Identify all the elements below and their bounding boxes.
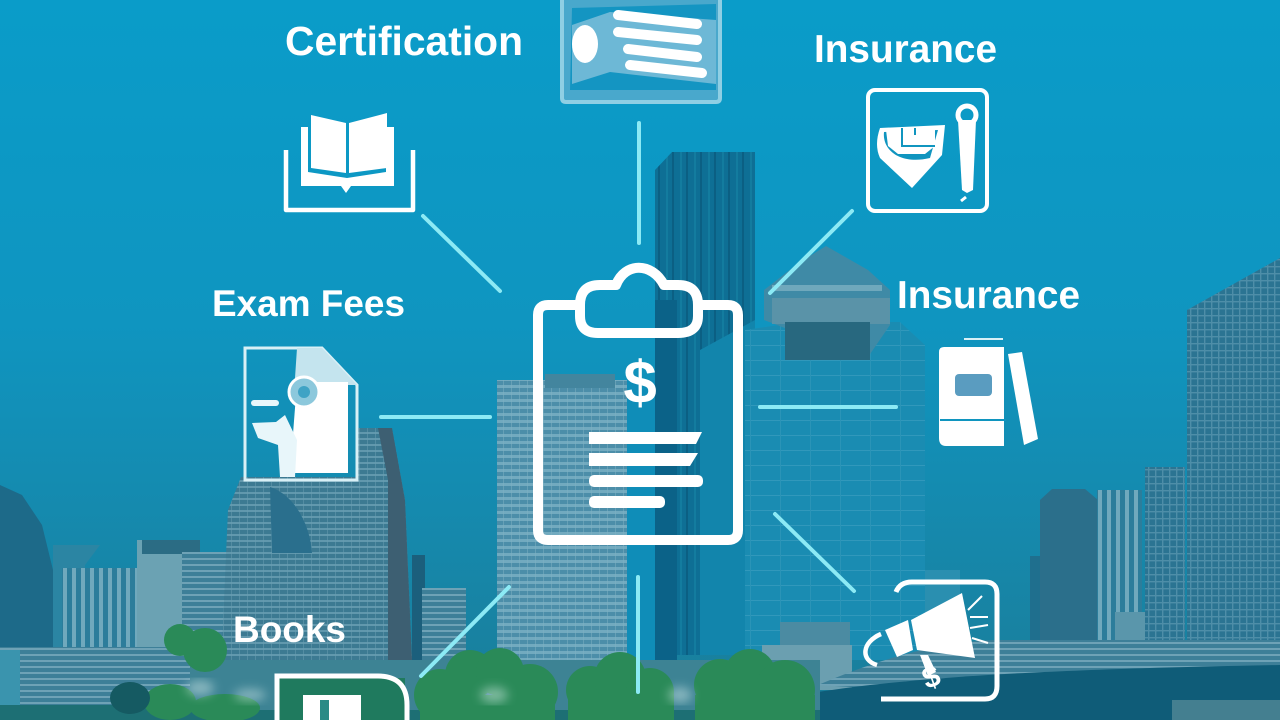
glass tower right <box>745 322 925 660</box>
right skyline towers <box>1030 556 1042 640</box>
low waterfront building <box>780 622 850 662</box>
heading: Insurance top: Insurance <box>814 28 997 71</box>
icon: books bottom-left <box>277 676 407 720</box>
line to bottom-left icon <box>421 587 509 676</box>
icon: insurance shield and pen <box>868 90 987 211</box>
clipboard clip <box>580 268 698 333</box>
mid-left curved tower <box>222 428 412 660</box>
line to top icon <box>637 123 641 243</box>
trees <box>110 624 815 720</box>
clipboard body <box>538 305 738 540</box>
tall dark tower <box>655 152 755 655</box>
icon: open book <box>286 113 413 210</box>
dollar sign: $ <box>623 349 657 416</box>
icon: certificate card <box>562 0 720 102</box>
icon: megaphone with dollar <box>865 582 997 699</box>
icon: notebook and book <box>939 339 1038 446</box>
list lines <box>589 432 703 508</box>
icon: megaphone with dollar: $ <box>918 659 945 696</box>
line to insurance icon <box>770 211 852 293</box>
line to bottom <box>636 577 640 692</box>
far-left dark tower <box>0 485 53 650</box>
center-left tower <box>497 380 628 662</box>
line to right insurance icon <box>760 405 896 409</box>
low building left <box>0 647 190 705</box>
bridge <box>818 665 1280 720</box>
line to exam fees icon <box>381 415 490 419</box>
icon: central clipboard <box>538 268 738 540</box>
city skyline <box>0 152 1280 720</box>
line to books icon <box>423 216 500 291</box>
crown of glass tower <box>764 246 890 360</box>
line to megaphone <box>775 514 854 591</box>
connector lines <box>381 123 896 692</box>
heading: Books: Books <box>233 609 346 650</box>
heading: Insurance right: Insurance <box>897 274 1080 317</box>
base strip <box>0 705 820 720</box>
lamp glows <box>186 680 692 703</box>
heading: Certification: Certification <box>285 18 523 64</box>
heading: Exam Fees: Exam Fees <box>212 283 405 324</box>
icon: exam fee document <box>245 348 357 480</box>
